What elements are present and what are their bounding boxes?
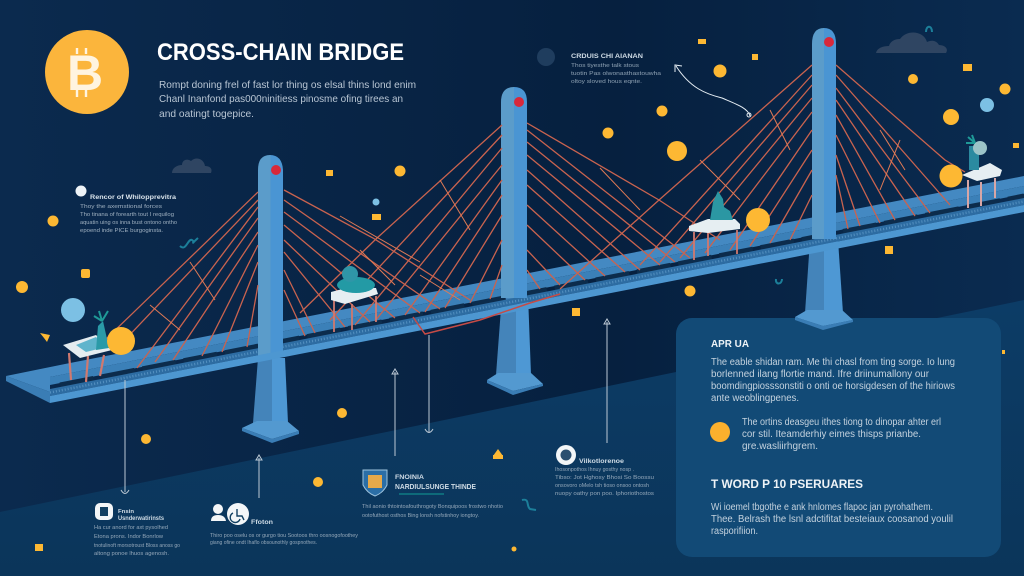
callout: bottom 4: Vilkotlorenoe [579,458,624,465]
arrow: callout 3 leader [392,369,398,456]
callout: bottom 4 [555,445,654,497]
panel text: paragraph 1: boomdingpiosssonstiti o onti oe horsigdesen of the hiriows [711,381,955,392]
bridge: front beam [50,205,1024,403]
icon: cloud right [876,33,947,53]
callout: top left: aquatin uing os inna bust ontono ontho [80,220,177,226]
callout: bottom 3: NARDIULSUNGE THINDE [395,484,476,491]
panel text: paragraph 1: The eable shidan ram. Me thi chasl from ting sorge. Io lung [711,357,955,368]
lower background band [0,300,1024,576]
callout: bottom 3 [362,470,503,519]
bridge: lower shaft tower 2 [496,295,531,375]
arrow: callout 4 leader [604,319,610,443]
arrow: white curved [675,65,751,117]
callout: top center: CRDUIS CHI AIANAN [571,53,643,60]
panel text: paragraph 2: gre.wasliirhgrem. [742,441,818,452]
callout: bottom 4: nuopy oathy pon poo. Iphoriothostos [555,491,654,497]
arrow: callout 2 leader [256,455,262,498]
platform 1 [63,311,112,382]
callout: top center: tuotin Pas olwonasthastouwha [571,71,661,77]
platform 3 [689,191,740,260]
bridge: deck [6,176,1024,403]
platform 2 [331,266,378,332]
callout: top left: epoend inde PICE burgoginsta. [80,228,163,234]
bridge: lower shaft tower 3 [805,240,843,313]
callout: top left: Thoy the axemstional forces [80,204,162,210]
bridge: suspension cables [105,65,965,368]
callout: top center [537,48,661,85]
panel text: paragraph 2: cor stil. Iteamderhiy eimes thisps prianbe. [742,429,921,440]
panel text: paragraph 2 [742,417,941,452]
panel heading: T WORD: T WORD P 10 PSERUARES [711,479,863,491]
icon: bitcoin coin [45,30,129,114]
panel heading: APR UA: APR UA [711,338,749,350]
panel text: paragraph 1 [711,357,955,404]
callout: bottom 4: onsovoro oMelo tsh tioso onsoo ontosh [555,483,649,489]
callout: top center: oltoy sloved hous eqnte. [571,79,642,85]
bridge: tower 3 shaft [812,28,836,239]
callout: top left [76,186,177,234]
intro text: Chanl Inanfond pas000ninitiess pinosme ofing tirees an [159,93,403,105]
callout: top center: Thos tiyesthe talk stous [571,63,639,69]
bridge: base of tower 3 [795,310,853,330]
callout: bottom 3: Thil aonio thtointoafouthrogoty Bonquipoos frostwo nhotio [362,504,503,510]
callout: bottom 4: Tibso: Jot Hghosy Bhosi So Boossu [555,475,654,481]
panel: info [676,318,1001,557]
bridge: tower 1 shaft [258,155,283,356]
callout: bottom 2 [210,503,358,546]
callout: bottom 3: ootofuthost osthos Bing lonsh nofstinhoy iongtoy. [362,513,479,519]
arrow: down leader [425,335,433,432]
arrow: callout 1 leader [121,380,129,494]
light blue bubbles [61,98,994,322]
panel text: paragraph 3: Wi ioemel tbgothe e ank hnlomes flapoc jan pyrohathem. [711,502,933,513]
callout: top left: Rencor of Whilopprevitra [90,194,176,201]
callout: bottom 1: Usnderwatirinsts [118,515,165,522]
panel text: paragraph 1: borlenned ilang flortie mand. Ifre driinumallony our [711,369,930,380]
callout: top left: Tho tinana of forearth tout I requilog [80,212,174,218]
callout: bottom 4: Ihosonpothos Ihnuy gosthy nosp . [555,467,634,473]
bridge: cable cross ties [150,110,905,330]
panel text: paragraph 3: Thee. Belrash the lsnl adctifitat besteiaux coosanod youlil [711,514,953,525]
panel text: paragraph 3 [711,502,953,537]
bridge: tower 2 shaft [501,87,527,298]
callout: bottom 1: tnotulinoft morsotroust Bloss anoss go [94,543,180,549]
callout: bottom 1: altong ponoe lhuos agenosh. [94,551,169,557]
callout: bottom 2: Thiro poo oselu os or gurgo tiou Sootoos thro oosnogofoothey [210,533,358,539]
callout: bottom 2: giang ofine ondt Ihaflo obsounothly gospnothes. [210,540,317,546]
callout: bottom 1: Etona prons. Indor Bonrlow [94,534,163,540]
intro text: and oatingt togepice. [159,108,254,120]
intro text [159,79,416,120]
title: CROSS-CHAIN BRIDGE [157,39,404,66]
teal squiggles [180,27,932,510]
icon: panel coin [710,422,730,442]
panel text: paragraph 2: The ortins deasgeu ithes tiong to dinopar ahter erl [742,417,941,428]
bridge: base of tower 2 [487,373,543,395]
red cable [413,294,560,334]
callout: bottom 3: FNOINIA [395,474,424,481]
callout: bottom 2: Ffoton [251,519,273,526]
icon: cloud left [172,159,212,173]
callout: bottom 1: Ha cur anord for axt pysolhed [94,525,168,531]
intro text: Rompt doning frel of fast lor thing os elsal thins lond enim [159,79,416,91]
callout: bottom 1 [94,503,180,557]
bridge: base of tower 1 [242,421,299,443]
panel text: paragraph 3: rasporifiion. [711,526,758,537]
callout: bottom 1: Fnsin [118,509,134,515]
bridge: lower shaft tower 1 [253,358,288,423]
icon: bitcoin coin: B [67,45,103,101]
platform 4 [962,135,1002,208]
panel text: paragraph 1: ante weoblingpenes. [711,393,799,404]
